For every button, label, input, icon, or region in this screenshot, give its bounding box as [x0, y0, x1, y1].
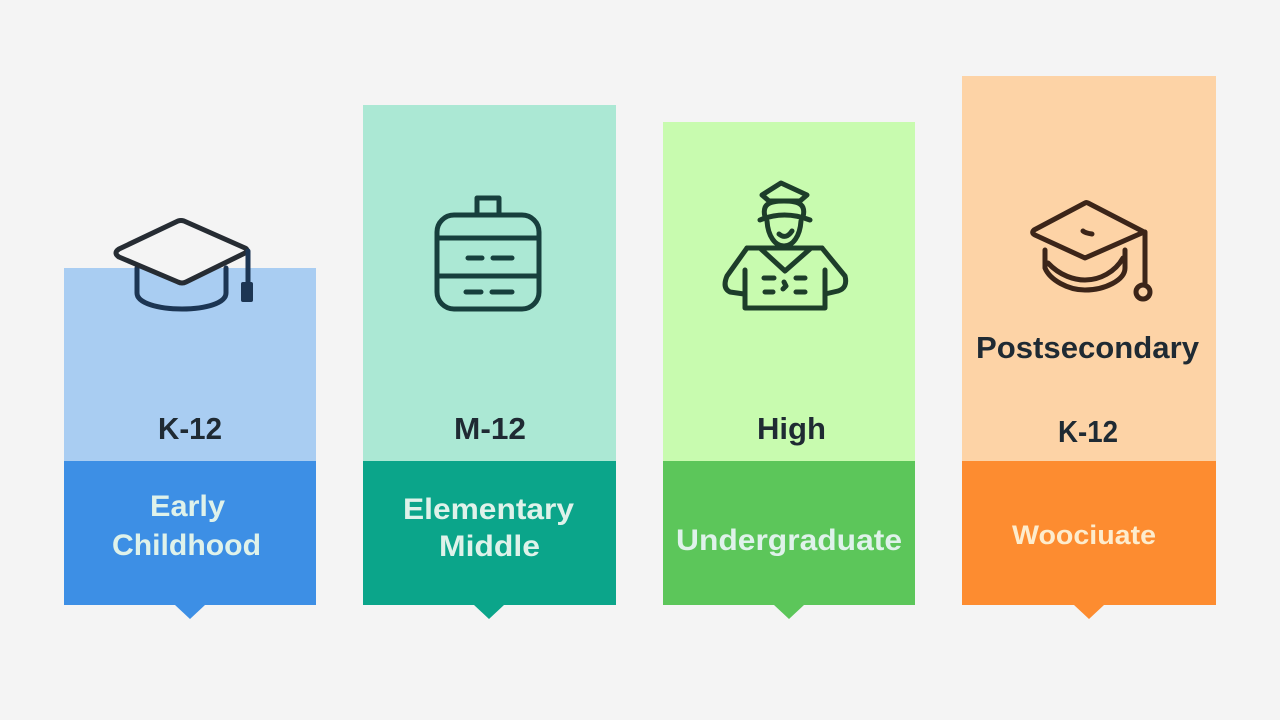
- panel: elementary and middle: [363, 105, 616, 619]
- label: M-12: M-12: [454, 411, 526, 446]
- label: Early Childhood: Early: [150, 490, 225, 523]
- upper block: mint: [363, 105, 616, 461]
- lower block with pointer: green: [663, 461, 915, 619]
- upper block: lime: [663, 122, 915, 461]
- label: K-12: K-12: [1058, 414, 1118, 449]
- upper block: peach: [962, 76, 1216, 461]
- label: High: High: [757, 411, 826, 446]
- label: Early Childhood: Childhood: [112, 529, 261, 562]
- label: Woociuate: Woociuate: [1012, 520, 1156, 550]
- label: Elementary Middle: Middle: [439, 530, 540, 563]
- label: Elementary Middle: Elementary: [403, 493, 574, 526]
- upper block: blue: [64, 268, 316, 461]
- lower block with pointer: blue: [64, 461, 316, 619]
- panel: early childhood: [64, 220, 316, 619]
- label: Early Childhood: [112, 490, 261, 562]
- icon: building block: [437, 198, 539, 309]
- label: Postsecondary: Postsecondary: [976, 330, 1200, 365]
- lower block with pointer: teal: [363, 461, 616, 619]
- label: Elementary Middle: [403, 493, 574, 563]
- label: K-12: K-12: [158, 411, 222, 446]
- icon: graduation cap: [116, 220, 253, 309]
- panel: high and undergraduate: [663, 122, 915, 619]
- icon: graduation cap with tassel: [1033, 202, 1150, 299]
- panel: postsecondary: [962, 76, 1216, 619]
- label: Undergraduate: Undergraduate: [676, 524, 902, 557]
- icon: student: [725, 183, 846, 308]
- lower block with pointer: orange: [962, 461, 1216, 619]
